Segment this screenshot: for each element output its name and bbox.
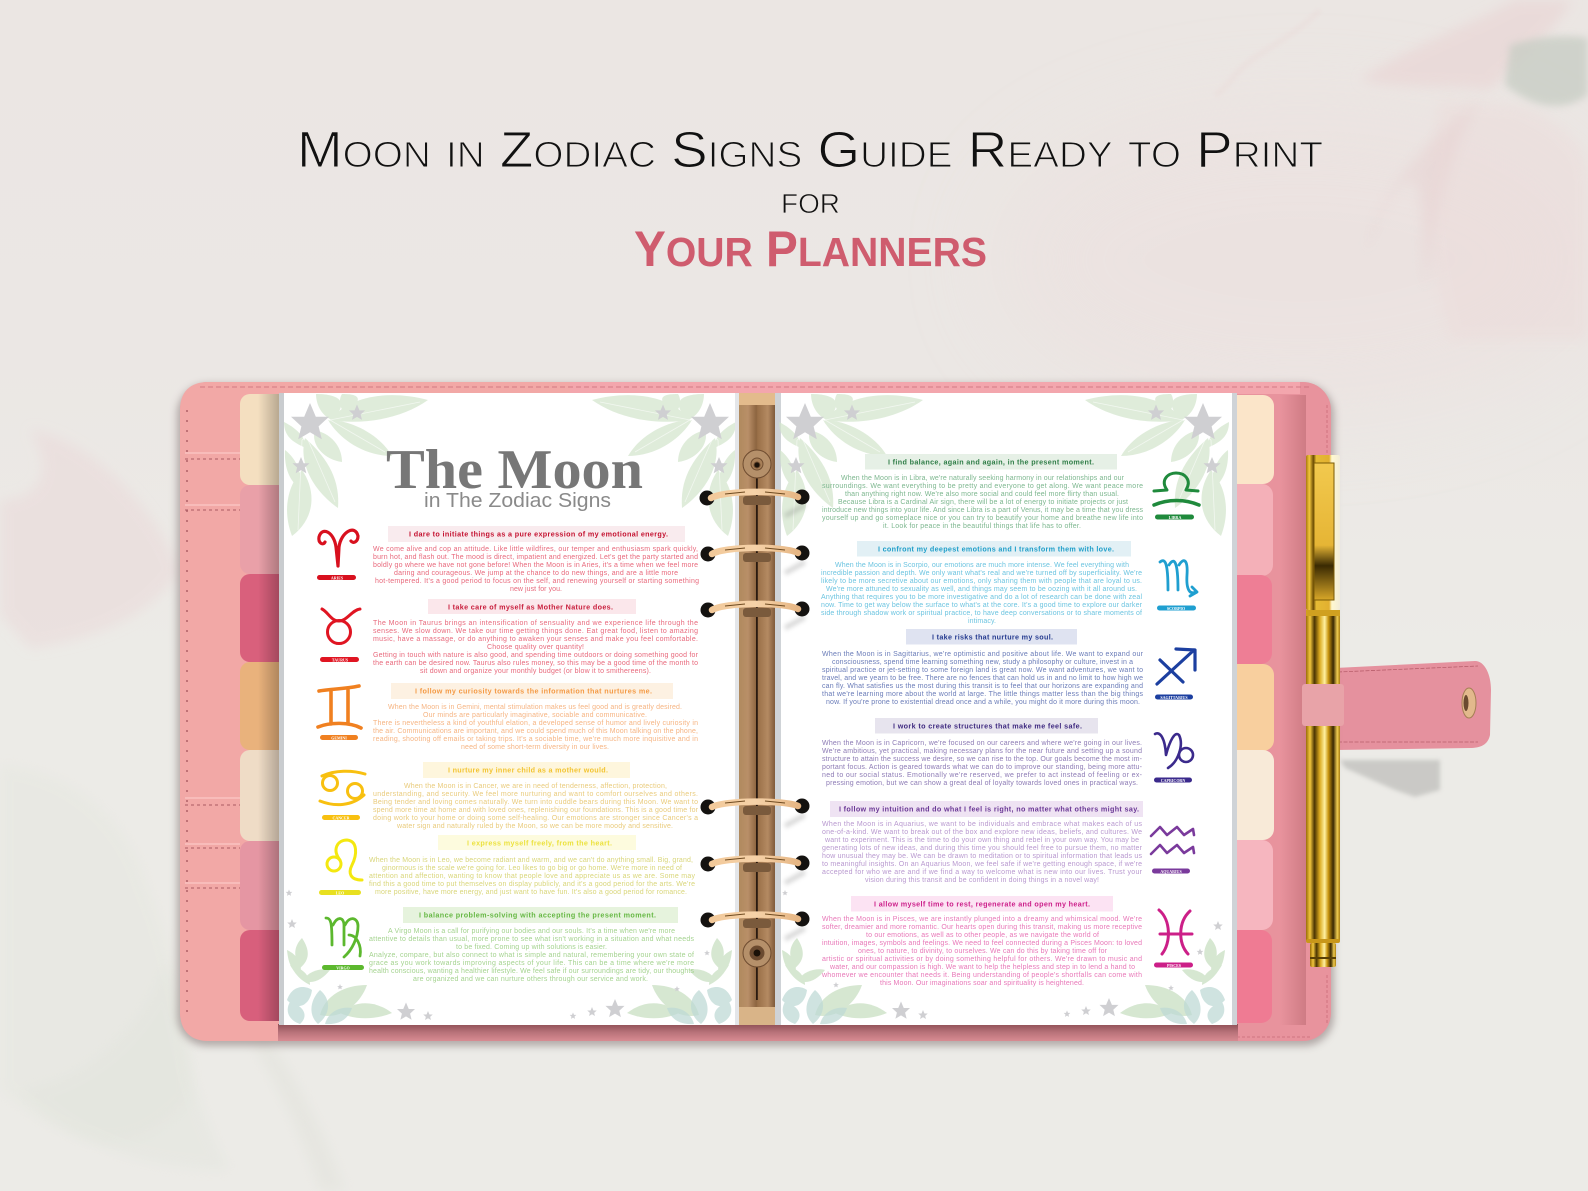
title [297,121,1323,279]
eyelets [743,450,771,967]
section: Pisces: this Moon. Our imaginations soar and spirituality is heightened. [880,980,1084,987]
section: Leo: more positive, have more energy, and just want to have fun. It's also a good period for romance. [375,889,687,896]
section: Gemini: the air. Communications are important, and we could spend much of this Moon talking on the phone, [373,728,698,735]
section: Sagittarius: travel, and we yearn to be free. There are no fences that can hold us in and no limit to how high we [822,675,1143,682]
icon: Libra [1154,473,1199,520]
icon: Cancer: CANCER [332,815,350,820]
section: Virgo: grace as you work towards improving aspects of your life. This can be a time where we're more [369,960,694,967]
section: Aries: daring and courageous. We jump at the chance to do new things, and are a little more [394,570,678,577]
icon: Scorpio: SCORPIO [1167,606,1185,611]
icon: Sagittarius [1155,649,1195,700]
pen elastic band [1302,684,1344,726]
section: Cancer: water sign and naturally ruled by the Moon, so we can be more moody and sensitive. [396,823,673,830]
section: Cancer: spend more time at home and with loved ones, replenishing our foundations. This is a good time for [373,807,699,814]
icon: Sagittarius: SAGITTARIUS [1160,695,1188,700]
section: Pisces: When the Moon is in Pisces, we are instantly plunged into a dreamy and whimsical mood. We're [822,916,1142,923]
icon: Aquarius: AQUARIUS [1160,869,1182,874]
section: Aquarius: how unusual they may be. We can be drawn to meditation or to spiritual information that leads us [822,853,1142,860]
section: Cancer [320,762,699,830]
left inner pockets [185,410,240,1012]
heading: The Moon: The Moon [386,439,643,501]
section: Gemini: There is nevertheless a kind of youthful elation, a developed sense of humor and lively curiosity in [373,720,698,727]
section: Pisces: softer, dreamier and more romantic. Our hearts open during this transit, making us more receptive [822,924,1142,931]
section: Virgo: Analyze, compare, but also connect to what is simple and natural, remembering your own state of [369,952,694,959]
section: Aquarius: generating lots of new ideas, and during this time you should feel free to pursue them, no matter [822,845,1143,852]
section: Virgo: health conscious, wanting a healthier lifestyle. We feel safe if our surroundings are tidy, our thoughts [369,968,694,975]
section: Taurus [320,599,699,675]
section: Libra: introduce new things into your life. And since Libra is a part of Venus, it may be a time that you dress [822,507,1144,514]
section: Libra: I find balance, again and again, in the present moment. [888,458,1094,466]
icon: Gemini: GEMINI [331,735,347,740]
section: Leo: When the Moon is in Leo, we become radiant and warm, and we can't do anything small. Big, grand, [369,857,693,864]
section: Sagittarius: consciousness, spend time learning something new, study a philosophy or culture, invest in a [832,659,1133,666]
icon: Aries [317,530,358,580]
section: Capricorn [822,718,1193,787]
section: Gemini [318,683,698,751]
title: for [781,178,840,222]
right page [775,393,1237,1025]
section: Sagittarius: spiritual practice or jet-setting to some foreign land is great now. We want adventures, we want to [822,667,1143,674]
heading: The Moon: in The Zodiac Signs [424,490,611,512]
section: Sagittarius: now. If you're prone to existential dread once and a while, you might do it more during this moon. [826,699,1140,706]
icon: Capricorn [1154,733,1193,783]
section: Taurus: The Moon in Taurus brings an intensification of sensuality and we experience life through the [373,620,698,627]
section: Cancer: Being tender and loving comes naturally. We turn into cuddle bears during this Moon. We want to [373,799,698,806]
section: Aries: new just for you. [510,586,562,593]
section: Aries: hot-tempered. It's a good period to focus on the self, and renewing yourself or starting something [375,578,699,585]
icon: Virgo: VIRGO [336,965,350,970]
section: Aquarius: one-of-a-kind. We want to break out of the box and explore new ideas, beliefs, and cultures. We [822,829,1142,836]
title: Moon in Zodiac Signs Guide Ready to Print [297,121,1323,178]
section: Pisces: whomever we encounter that needs it. Being understanding of people's shortfalls can come with [821,972,1142,979]
section: Sagittarius: can fly. What satisfies us the most during this transit is to feel that our horizons are expanding and [822,683,1143,690]
icon: Aquarius [1151,827,1194,874]
section: Leo: attention and affection, wanting to know that people love and appreciate us as we are. Some may [369,873,696,880]
section: Gemini: I follow my curiosity towards the information that nurtures me. [415,686,652,696]
section: Taurus: Getting in touch with nature is also good, and spending time outdoors or doing something good for [373,652,699,659]
left divider tabs [240,394,300,1021]
section: Sagittarius: that we're learning more about the world at large. The little things matter less than the big things [822,691,1144,698]
section: Taurus: Choose quality over quantity! [487,644,584,651]
section: Capricorn: pressing emotion, but we can show a great deal of loyalty towards loved ones in practical ways. [826,780,1138,787]
section: Aries: burn hot, and flash out. The mood is direct, impatient and energized. Let's get the party started and [373,554,698,561]
section: Taurus: I take care of myself as Mother Nature does. [448,602,613,612]
section: Capricorn: We're ambitious, yet practical, making necessary plans for the near future and setting up a sound [822,748,1142,755]
section: Capricorn: I work to create structures that make me feel safe. [893,722,1082,730]
icon: Pisces: PISCES [1167,963,1182,968]
section: Cancer: When the Moon is in Cancer, we are in need of tenderness, affection, protection, [404,783,667,790]
section: Virgo: I balance problem-solving with accepting the present moment. [419,910,656,920]
section: Libra: than anything right now. We're also more social and could feel more flirty than usual. [845,491,1119,498]
section: Pisces: I allow myself time to rest, regenerate and open my heart. [874,900,1090,908]
section: Capricorn: When the Moon is in Capricorn, we're focused on our careers and where we're going in our lives. [822,740,1142,747]
section: Gemini: reading, shooting off emails or taking trips. It's a sociable time, we're much more inquisitive and in [373,736,698,743]
icon: Capricorn: CAPRICORN [1161,778,1185,783]
icon: Leo [319,840,362,895]
section: Aquarius: accepted for who we are and if we find a way to welcome what is new into our lives. Trust your [822,869,1143,876]
icon: Gemini [318,686,361,740]
section: Libra: Because Libra is a Cardinal Air sign, there will be a lot of energy to initiate projects or just [838,499,1128,506]
leaf and star corners [779,394,1229,1024]
section: Scorpio: When the Moon is in Scorpio, our emotions are much more intense. We feel everything with [835,562,1129,569]
section: Sagittarius: I take risks that nurture my soul. [932,632,1053,642]
section: Virgo: attentive to details than usual, more prone to see what isn't working in a situation and what needs [369,936,694,943]
planner cover [177,382,1334,1046]
section: Capricorn: structure to attain the success we desire, so we can rise to the top. Our goals become the most im- [822,756,1143,763]
section: Virgo [322,907,694,983]
icon: Virgo [322,918,364,970]
section: Aquarius [822,801,1194,884]
section: Capricorn: ned to our social status. Emotionally we're reserved, we prefer to act instead of feeling or ex- [822,772,1143,779]
section: Taurus: sit down and organize your monthly budget (or blow it to smithereens). [420,668,651,675]
section: Virgo: A Virgo Moon is a call for purifying our bodies and our souls. It's a time when we're more [388,928,675,935]
section: Libra: surroundings. We want everything to be pretty and everyone to get along. We want peace more [822,483,1143,490]
section: Scorpio: I confront my deepest emotions and I transform them with love. [878,544,1114,554]
section: Pisces [821,896,1193,987]
section: Sagittarius [822,629,1195,706]
section: Aquarius: vision during this transit and be confident in doing things in a novel way! [865,877,1099,884]
section: Libra: it. Look for peace in the beautiful things that life has to offer. [883,523,1081,530]
section: Taurus: the earth can be desired now. Taurus also rules money, so this may be a good time of the month to [373,660,698,667]
gold pen [1302,455,1344,967]
section: Pisces: ones, to nature, to divinity, to ourselves. We can do this by taking time off for [858,948,1108,955]
section: Scorpio [821,541,1197,625]
section: Scorpio: side through shadow work or spiritual practice, to have deep conversations or to share moments of [821,610,1142,617]
section: Pisces: to our emotions, as well as to other people, as we navigate the world of [866,932,1099,939]
binder spine [735,393,775,1025]
section: Aquarius: When the Moon is in Aquarius, we want to be individuals and embrace what makes each of us [822,821,1142,828]
binder rings [700,490,810,939]
section: Gemini: need of some short-term diversity in our lives. [461,744,609,751]
section: Cancer: doing work to your home or doing some self-healing. Our emotions are stronger since Cancer's a [373,815,698,822]
section: Scorpio: incredible passion and depth. We only want what's real and we're turned off by superficiality. We're [821,570,1142,577]
section: Sagittarius: When the Moon is in Sagittarius, we're optimistic and positive about life. We want to expand our [822,651,1144,658]
icon: Libra: LIBRA [1169,515,1181,520]
section: Aquarius: want to experiment. This is the time to do your own thing and rebel in your own way. You may be [824,837,1139,844]
section: Gemini: When the Moon is in Gemini, mental stimulation makes us feel good and is greatly desired. [388,704,682,711]
section: Aries: I dare to initiate things as a pure expression of my emotional energy. [409,530,668,538]
section: Libra [822,454,1199,530]
section: Aquarius: to meaningful insights. On an Aquarius Moon, we feel safe if we're getting enough space, if we're [822,861,1142,868]
section: Aquarius: I follow my intuition and do what I feel is right, no matter what others might say. [839,804,1139,814]
section: Cancer: understanding, and security. We feel more nurturing and want to comfort ourselves and others. [373,791,698,798]
section: Libra: When the Moon is in Libra, we're naturally seeking harmony in our relationships and our [841,475,1125,482]
section: Virgo: to be fixed. Coming up with solutions is easier. [456,944,607,951]
section: Leo: find this a good time to put themselves on display publicly, and it's a good period for the arts. We're [369,881,695,888]
section: Aries: We come alive and cop an attitude. Like little wildfires, our temper and enthusiasm spark quickly, [373,546,698,553]
section: Gemini: Our minds are particularly imaginative, sociable and communicative. [423,712,647,719]
section: Scorpio: intimacy. [968,618,996,625]
icon: Cancer [320,771,365,820]
section: Pisces: water, and our compassion is high. We want to help the helpless and step in to lend a hand to [829,964,1135,971]
right divider tabs [1210,395,1274,1023]
icon: Aries: ARIES [331,575,344,580]
title: Your Planners [634,214,987,279]
section: Aries [317,526,699,593]
section: Taurus: music, have a massage, or do anything to awaken your senses and make you feel comfortable. [373,636,698,643]
section: Leo [319,835,696,896]
leaf and star corners [284,394,736,1024]
section: Scorpio: likely to be more secretive about our emotions, only sharing them with people that are loyal to us. [821,578,1142,585]
icon: Leo: LEO [336,890,344,895]
section: Aries: boldly go where we have not gone before! When the Moon is in Aries, it's a time when we feel more [373,562,698,569]
section: Libra: yourself up and go someplace nice or you can try to beautify your home and breathe new life into [822,515,1143,522]
section: Leo: ginormous is the scale we're going for. Leo likes to go big or go home. We're more in need of [382,865,682,872]
section: Cancer: I nurture my inner child as a mother would. [448,766,608,774]
strap with snap button [1335,661,1491,797]
section: Virgo: are organized and we can nurture others through our service and work. [413,976,648,983]
section: Scorpio: now. Time to get way below the surface to what's at the core. It's a good time to explore our darker [821,602,1143,609]
icon: Pisces [1154,910,1193,968]
section: Pisces: artistic or spiritual activities or by doing something helpful for others. We're drawn to music and [822,956,1142,963]
icon: Taurus [320,609,360,662]
icon: Taurus: TAURUS [332,657,349,662]
icon: Scorpio [1157,561,1197,611]
section: Capricorn: portant focus. Action is geared towards what we can do to improve our standing, being more attu- [822,764,1143,771]
bottom edge [278,1024,1238,1041]
section: Leo: I express myself freely, from the heart. [467,838,612,848]
left page [279,393,739,1025]
section: Scorpio: Anything that requires you to be more investigative and do a lot of research can be done with zeal [821,594,1142,601]
section: Pisces: intuition, images, symbols and feelings. We need to feel connected during a Pisces Moon: to loved [822,940,1142,947]
section: Scorpio: We're more attuned to sexuality as well, and things may seem to be oozing with it all around us. [826,586,1137,593]
section: Taurus: senses. We slow down. We take our time getting things done. Eat great food, listen to amazing [373,628,698,635]
